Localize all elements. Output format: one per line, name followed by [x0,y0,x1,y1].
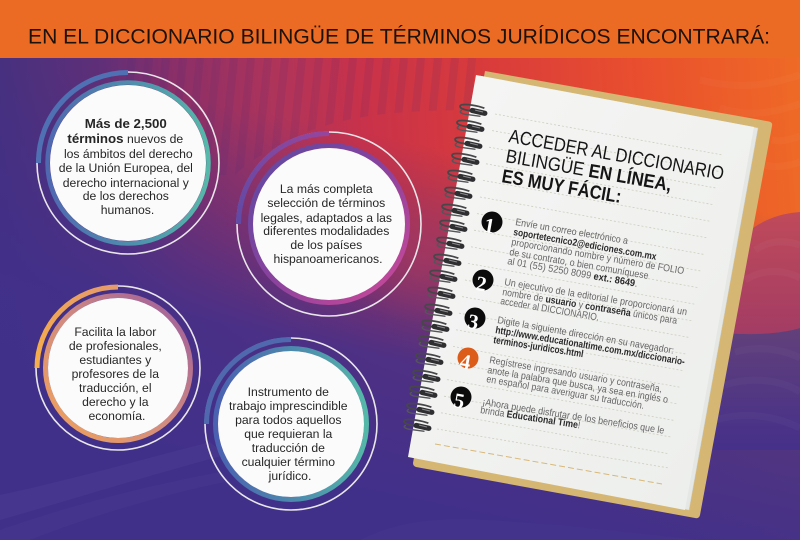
text: instrumento de trabajo: Instrumento de [248,385,329,399]
circle: instrumento de trabajo [205,338,377,510]
text: instrumento de trabajo: trabajo imprescindible [229,399,348,413]
background wave bands right [690,75,800,450]
background stripes top [160,58,476,172]
notebook heading: ES MUY FÁCIL: [500,165,623,208]
text: facilita la labor: derecho y la [82,395,149,409]
notebook cardboard back [413,71,772,518]
step 1 text: al 01 (55) 5250 8099 ext.: 8649. [506,256,638,290]
step 5 number [450,386,472,413]
step 1 number: 1 [482,213,497,238]
step 4 number [458,348,478,374]
text: facilita la labor: traducción, el [79,381,152,395]
step 5 number: 5 [452,388,467,413]
title band [0,0,800,58]
notebook under sheet [412,76,758,510]
text: facilita la labor: economía. [89,409,145,423]
step 1 text: de su contrato, o bien comuníquese [508,247,650,282]
step 3 text: terminos-juridicos.html [493,335,584,360]
step 3 number: 3 [466,309,481,334]
step 1 text: proporcionando nombre y número de FOLIO [510,237,685,277]
text: instrumento de trabajo: jurídico. [268,469,311,483]
step 4 text: en español para averiguar su traducción. [485,374,645,412]
title: EN EL DICCIONARIO BILINGÜE DE TÉRMINOS JURÍDICOS ENCONTRARÁ: [28,24,770,48]
notebook heading: BILINGÜE EN LÍNEA, [504,145,673,196]
step 1 text [506,217,685,290]
text: instrumento de trabajo: cualquier término [242,455,335,469]
notebook heading: ACCEDER AL DICCIONARIO [507,126,725,185]
background glow left of notebook [340,185,510,325]
text: instrumento de trabajo: para todos aquellos [235,413,342,427]
step 1 number [482,212,502,238]
step 1 text: soportetecnico2@ediciones.com.mx [512,227,658,263]
step 4 text: Regístrese ingresando usuario y contraseña, [488,355,663,395]
step 2 text: nombre de usuario y contraseña únicos para [502,287,678,327]
text: selección de términos legales: de los países [290,238,362,252]
text: facilita la labor: profesores de la [72,367,159,381]
step 4 text: anote la palabra que busca, ya sea en inglés o [487,365,669,406]
text: selección de términos legales: selección de términos [267,196,385,210]
text: facilita la labor: estudiantes y [79,353,152,367]
text: más de 2,500 términos: de los derechos [83,189,169,203]
notebook [403,71,772,518]
text: más de 2,500 términos: de la Unión Europea, del [59,161,193,175]
text: más de 2,500 términos: términos nuevos de [67,131,183,146]
text: más de 2,500 términos: los ámbitos del derecho [64,147,193,161]
circle: más de 2,500 términos [37,72,219,254]
text: selección de términos legales: hispanoamericanos. [273,252,383,266]
text: instrumento de trabajo: traducción de [252,441,325,455]
notebook page [408,75,754,510]
circle: facilita la labor [36,286,200,450]
ruled lines [437,114,723,468]
step 4 number: 4 [458,349,473,374]
background wave bands bottom [0,442,700,540]
text: facilita la labor: de profesionales, [69,339,162,353]
text: más de 2,500 términos: Más de 2,500 [85,116,167,131]
text: selección de términos legales: legales, adaptados a las [261,211,392,225]
text: selección de términos legales: diferentes modalidades [263,224,389,238]
dashed tan line [435,444,662,484]
step 5 text: ¡Ahora puede disfrutar de los beneficios que le [482,397,665,437]
text: instrumento de trabajo: que requieran la [244,427,333,441]
step 3 text: http://www.educationaltime.com.mx/diccionario- [494,325,686,368]
step 2 text: Un ejecutivo de la editorial le proporcionará un [504,277,688,318]
step 1 text: Envíe un correo electrónico a [514,217,629,247]
step 2 text: acceder al DICCIONARIO. [499,296,600,324]
text: más de 2,500 términos: derecho internacional y [63,176,190,190]
step 5 text: brinda Educational Time! [480,405,581,431]
step 2 number [472,270,494,296]
text: más de 2,500 términos: humanos. [101,203,154,217]
circle: selección de términos legales [237,132,421,316]
step 3 number [464,308,486,334]
text: facilita la labor: Facilita la labor [74,325,156,339]
notebook heading [500,126,725,208]
step 2 number: 2 [474,271,489,296]
spiral binding [403,104,486,432]
step 3 text: Digite la siguiente dirección en su navegador: [496,315,675,357]
text: selección de términos legales: La más completa [280,182,373,196]
